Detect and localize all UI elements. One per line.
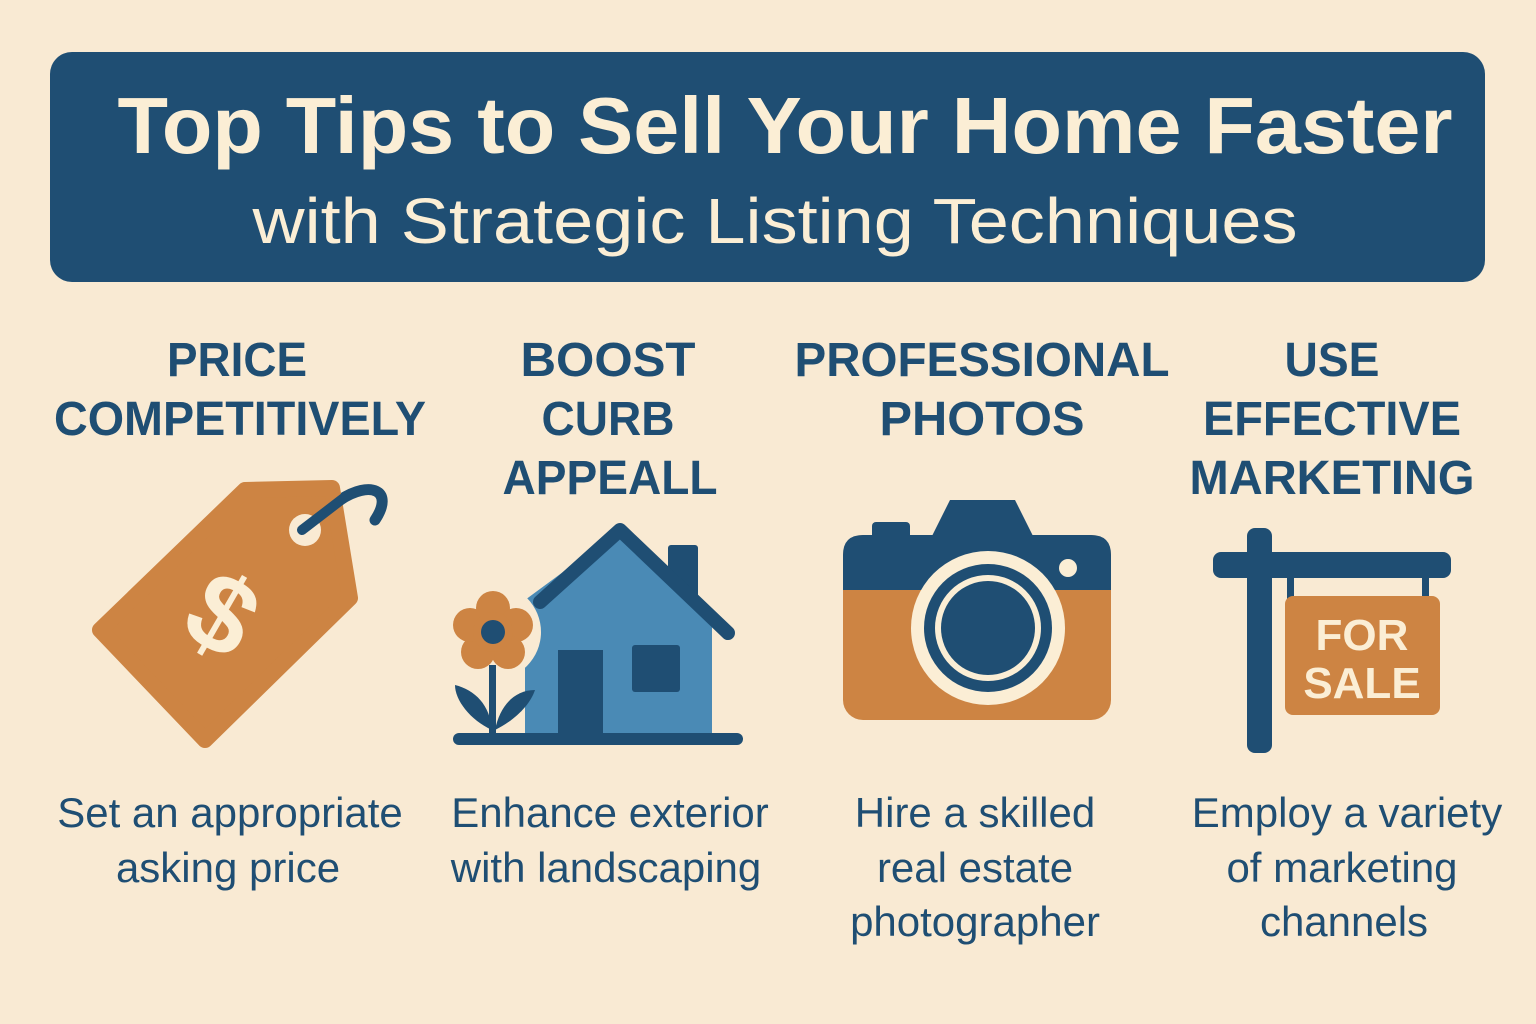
column 4 description: of marketing <box>1226 844 1458 891</box>
icon: for sale sign: FOR <box>1316 611 1408 660</box>
icon: for sale sign <box>1213 528 1451 753</box>
icon: price tag: $ <box>165 546 279 683</box>
column 4 description <box>1192 789 1502 945</box>
column 4 description: channels <box>1260 898 1428 945</box>
column 2 heading: boost curb appeal <box>502 334 718 505</box>
column 4 heading: use effective marketing: USE <box>1284 334 1380 387</box>
column 3 heading: professional photos: PROFESSIONAL <box>794 334 1170 387</box>
column 1 heading: price competitively: PRICE <box>167 334 307 387</box>
column 1 heading: price competitively: COMPETITIVELY <box>54 393 426 446</box>
column 2 heading: boost curb appeal: APPEALL <box>502 452 718 505</box>
subtitle: with Strategic Listing Techniques <box>251 185 1297 257</box>
column 4 description: Employ a variety <box>1192 789 1502 836</box>
title banner <box>50 52 1485 282</box>
icon: house with flower <box>445 530 743 745</box>
column 2 heading: boost curb appeal: BOOST <box>520 334 696 387</box>
column 3 heading: professional photos: PHOTOS <box>880 393 1084 446</box>
column 3 description: Hire a skilled <box>855 789 1095 836</box>
column 3 heading: professional photos <box>794 334 1170 446</box>
column 4 heading: use effective marketing: EFFECTIVE <box>1203 393 1461 446</box>
icon: for sale sign: SALE <box>1303 659 1421 708</box>
title: Top Tips to Sell Your Home Faster <box>118 81 1452 170</box>
column 1 heading: price competitively <box>54 334 426 446</box>
column 1 description: asking price <box>116 844 340 891</box>
column 1 description <box>57 789 403 891</box>
icon: price tag <box>100 488 382 740</box>
column 4 heading: use effective marketing: MARKETING <box>1190 452 1474 505</box>
column 4 heading: use effective marketing <box>1190 334 1474 505</box>
column 2 description: with landscaping <box>450 844 761 891</box>
icon: camera <box>843 500 1111 720</box>
column 3 description <box>850 789 1100 945</box>
column 3 description: real estate <box>877 844 1073 891</box>
column 1 description: Set an appropriate <box>57 789 403 836</box>
column 2 heading: boost curb appeal: CURB <box>542 393 674 446</box>
column 3 description: photographer <box>850 898 1100 945</box>
column 2 description: Enhance exterior <box>451 789 769 836</box>
column 2 description <box>450 789 769 891</box>
